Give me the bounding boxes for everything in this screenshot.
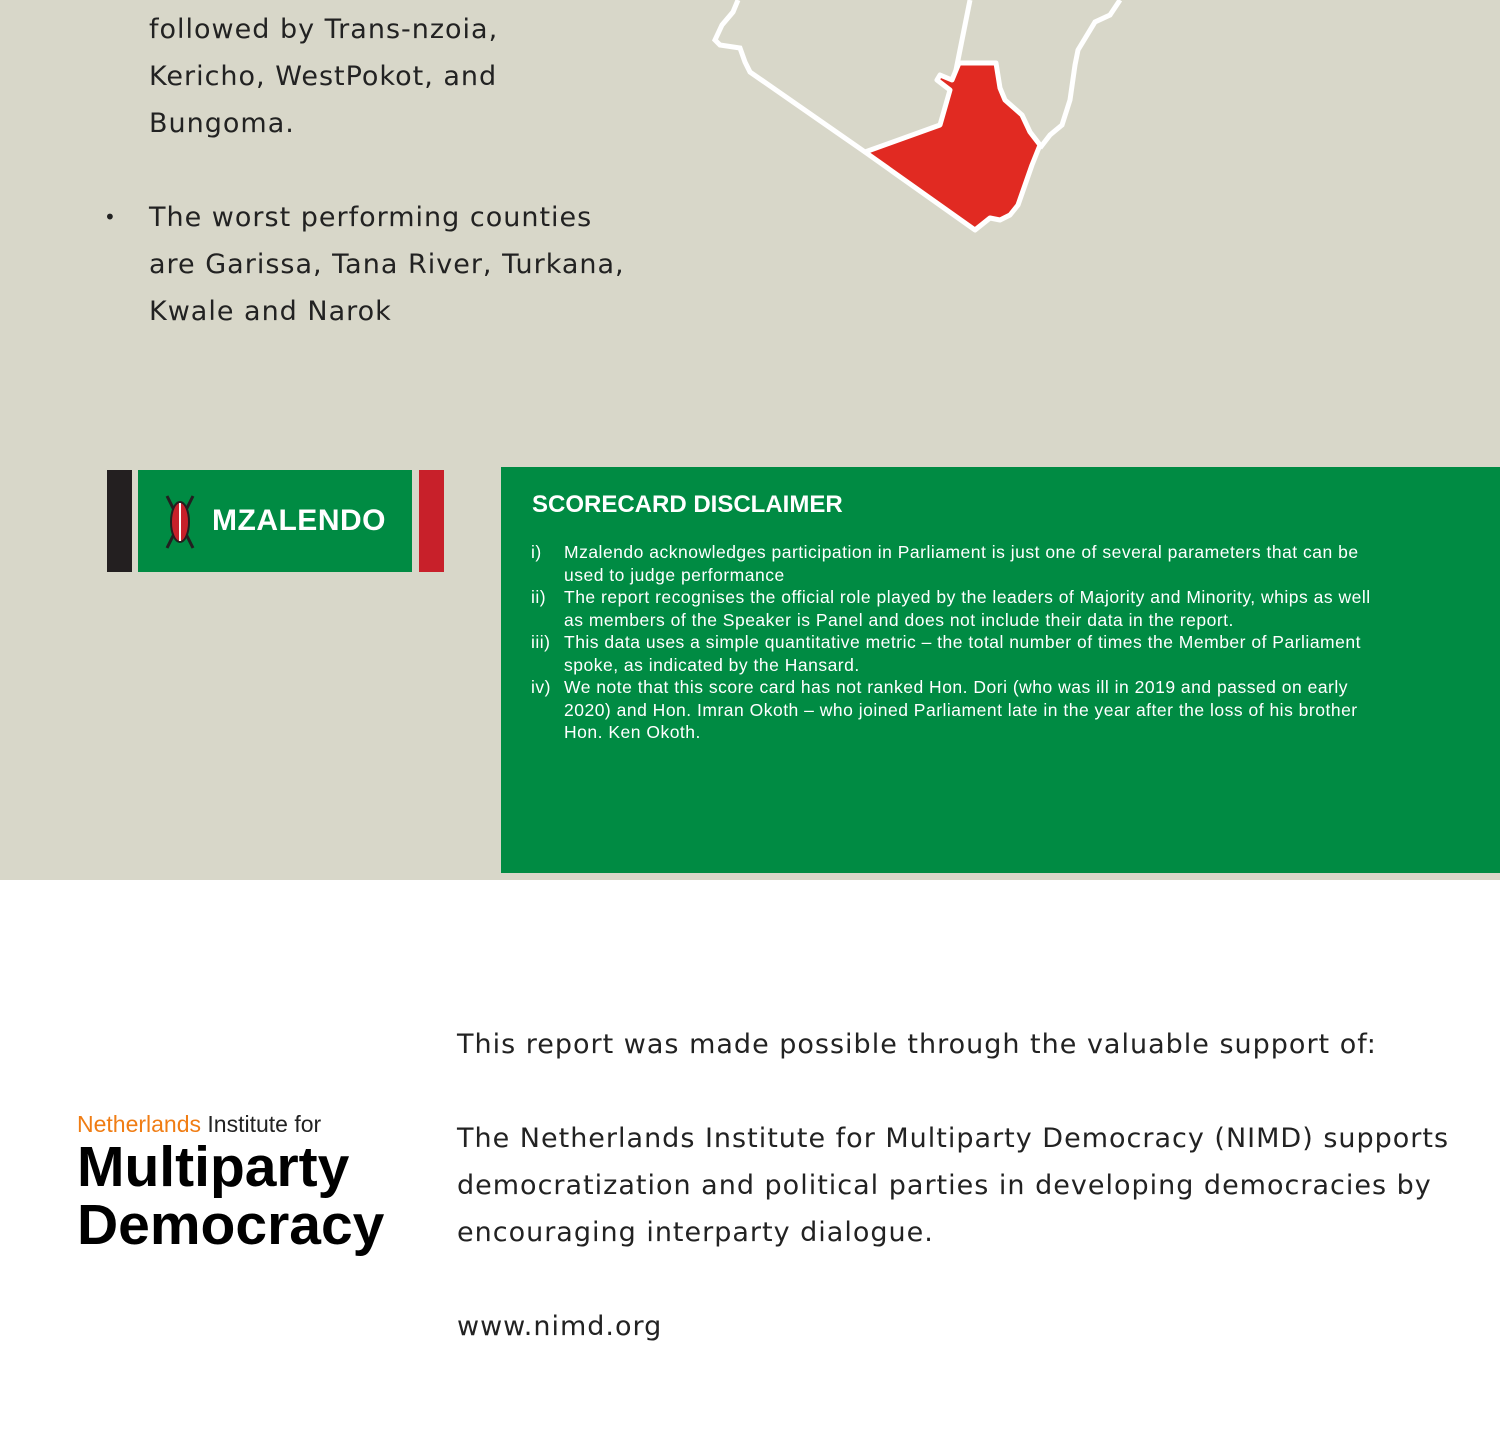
map [712,0,1122,233]
text block: best counties: followed by Trans-nzoia, [149,14,498,45]
text block: best counties: Bungoma. [149,108,295,139]
icon: shield [166,495,194,549]
text block: best counties [149,14,498,139]
heading: SCORECARD DISCLAIMER [532,491,843,518]
text block: support [456,1029,1449,1342]
disclaimer list: The report recognises the official role played by the leaders of Majority and Minority, whips as well [564,587,1371,607]
logo: NIMD [77,1111,384,1257]
text block: worst counties: • [104,205,117,229]
logo: Mzalendo: MZALENDO [212,504,386,537]
disclaimer list: Mzalendo acknowledges participation in Parliament is just one of several parameters that can be [564,542,1359,562]
text block: worst counties: are Garissa, Tana River, Turkana, [149,249,625,280]
text block: worst counties [104,202,625,327]
disclaimer list: spoke, as indicated by the Hansard. [564,654,860,674]
disclaimer list: used to judge performance [564,564,785,584]
disclaimer list: 2020) and Hon. Imran Okoth – who joined Parliament late in the year after the loss of his brother [564,700,1358,720]
disclaimer list: We note that this score card has not ranked Hon. Dori (who was ill in 2019 and passed on early [564,677,1348,697]
logo: NIMD: Netherlands Institute for [77,1111,321,1137]
text block: support: www.nimd.org [457,1311,662,1342]
disclaimer list: as members of the Speaker is Panel and does not include their data in the report. [564,610,1234,630]
text block: support: This report was made possible through the valuable support of: [457,1029,1377,1060]
logo: NIMD: Multiparty [77,1135,349,1199]
disclaimer list: ii) [531,587,546,607]
disclaimer list: This data uses a simple quantitative metric – the total number of times the Member of Parliament [564,632,1361,652]
disclaimer list [531,542,1371,742]
disclaimer list: iv) [531,677,551,697]
logo: Mzalendo [107,470,444,572]
disclaimer list: i) [531,542,542,562]
text block: worst counties: The worst performing counties [149,202,592,233]
disclaimer list: iii) [531,632,550,652]
text block: worst counties: Kwale and Narok [149,296,392,327]
logo: NIMD: Democracy [77,1193,384,1257]
disclaimer list: Hon. Ken Okoth. [564,722,701,742]
text block: support: The Netherlands Institute for Multiparty Democracy (NIMD) supports democratization and political parties in developing democracies by encouraging interparty dialogue. [457,1123,1449,1248]
panel: scorecard disclaimer [501,467,1500,873]
panel: beige top [0,0,1500,880]
text block: best counties: Kericho, WestPokot, and [149,61,497,92]
